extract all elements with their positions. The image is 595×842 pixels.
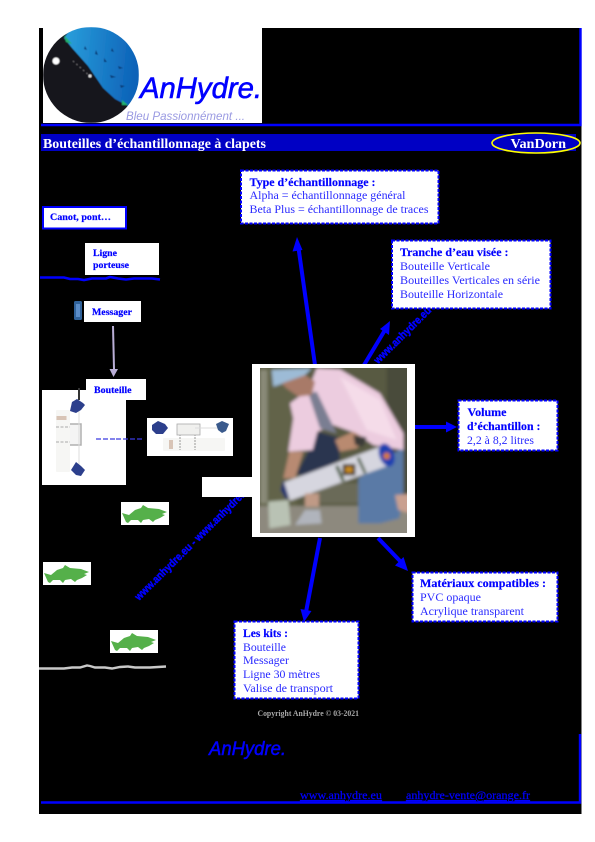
cap: [272, 368, 312, 387]
panel: sampling type: Alpha = échantillonnage général: [250, 190, 406, 202]
dashed link between bottles: [96, 438, 144, 440]
panel: materials: Matériaux compatibles :: [420, 578, 546, 590]
footer links: anhydre-vente@orange.fr: [406, 788, 530, 802]
lake bed line: [39, 666, 166, 668]
header frame: [41, 28, 580, 125]
arrow: messenger drops to bottle: [110, 326, 118, 377]
brand badge: VanDorn: [510, 137, 566, 152]
label: bottle: Bouteille: [94, 385, 132, 396]
blank label: [202, 477, 252, 497]
jeans: [297, 432, 340, 478]
footer links: www.anhydre.eu: [300, 788, 382, 802]
arm: [283, 452, 303, 478]
logo: globe: [43, 27, 139, 123]
panel: kits: Valise de transport: [243, 683, 334, 695]
icon: top valve: [70, 399, 85, 413]
carrier line: [40, 277, 160, 280]
arrow: to sampling type: [292, 237, 315, 365]
panel: sampling type: Type d’échantillonnage :: [250, 177, 376, 189]
logo: tagline: Bleu Passionnément ...: [126, 109, 245, 123]
face: [282, 375, 315, 397]
icon: right valve: [216, 421, 229, 433]
brand badge: [492, 133, 580, 153]
label: carrier line: Ligne: [93, 248, 118, 259]
arrow: to materials: [378, 538, 408, 571]
title: Bouteilles d’échantillonnage à clapets: [43, 137, 267, 152]
panel: sampling type: Beta Plus = échantillonnage de traces: [250, 204, 428, 216]
panel: water layer: Tranche d’eau visée :: [400, 247, 508, 259]
label: carrier line: [85, 243, 159, 275]
hand: [335, 432, 365, 452]
arrow: to kits: [300, 538, 320, 622]
title bar: [41, 134, 576, 152]
panel: volume: d’échantillon :: [467, 421, 540, 433]
copyright: Copyright AnHydre © 03-2021: [258, 708, 359, 718]
vertical bottle panel: [42, 388, 126, 485]
label: boat or bridge: Canot, pont…: [50, 212, 111, 223]
panel: materials: [412, 572, 558, 622]
panel: materials: PVC opaque: [420, 592, 481, 604]
panel: materials: Acrylique transparent: [420, 606, 525, 618]
icon: fish 1: [121, 502, 169, 525]
panel: water layer: Bouteille Verticale: [400, 261, 490, 273]
panel: volume: Volume: [468, 407, 506, 419]
panel: kits: [234, 622, 358, 698]
icon: messenger weight: [74, 301, 82, 320]
footer logo: AnHydre.: [208, 739, 286, 760]
diagonal website watermark: www.anhydre.eu - www.anhydre.eu - www.anhydre.eu - www.anhydre.eu - www.anhydre.eu: [132, 305, 434, 604]
panel: water layer: Bouteille Horizontale: [400, 289, 503, 301]
footer frame: [41, 734, 580, 802]
panel: sampling type: [241, 170, 438, 224]
bottle: [283, 447, 390, 501]
photo: operator with bottle: [252, 364, 415, 537]
panel: kits: Messager: [243, 655, 289, 667]
icon: fish 2: [43, 562, 91, 585]
footer links: [300, 788, 530, 802]
logo panel: [43, 27, 262, 123]
shirt: [288, 368, 403, 452]
label: messenger: Messager: [92, 307, 133, 318]
panel: water layer: Bouteilles Verticales en série: [400, 275, 540, 287]
panel: kits: Ligne 30 mètres: [243, 669, 320, 681]
panel: kits: Bouteille: [243, 642, 286, 654]
icon: bottom valve: [71, 462, 85, 476]
icon: left valve: [152, 421, 168, 434]
panel: kits: Les kits :: [243, 628, 288, 640]
label: bottle: [86, 379, 146, 400]
arrow: to volume: [413, 422, 457, 432]
arrow: to water layer: [364, 321, 390, 365]
label: messenger: [84, 301, 141, 322]
jar: [268, 500, 291, 528]
lower leg and shoe: [305, 493, 319, 507]
icon: fish 3: [110, 630, 158, 653]
horizontal bottle panel: [147, 418, 233, 456]
panel: water layer: [392, 240, 550, 308]
logo: wordmark: AnHydre.: [138, 72, 262, 105]
panel: volume: [458, 400, 558, 450]
label: boat or bridge: [43, 207, 126, 228]
panel: volume: 2,2 à 8,2 litres: [467, 435, 534, 447]
label: carrier line: porteuse: [93, 260, 130, 271]
